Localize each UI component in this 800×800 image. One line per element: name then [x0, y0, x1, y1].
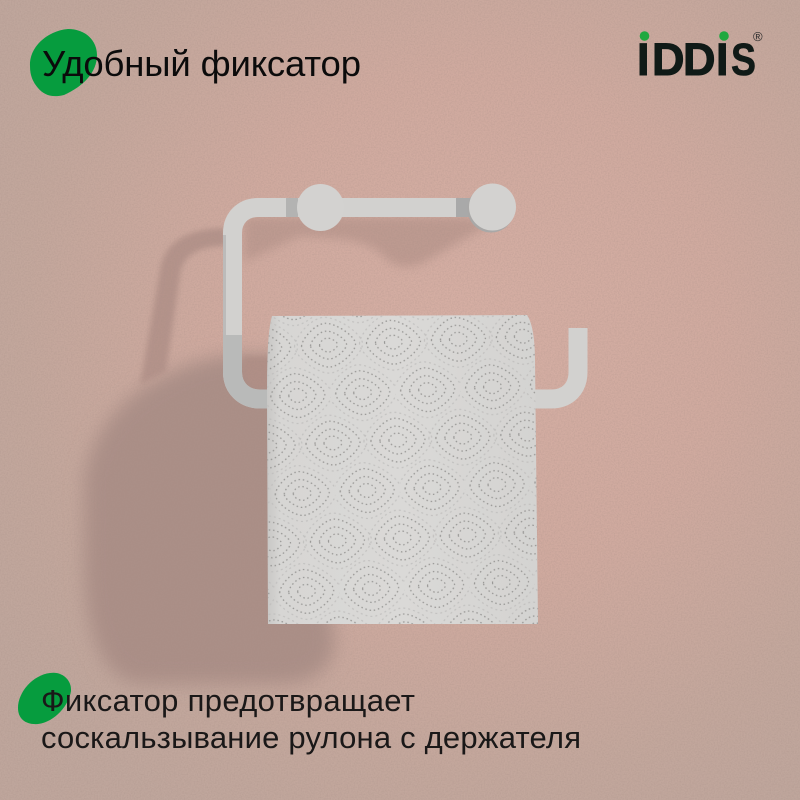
shadow: top bar: [244, 217, 490, 267]
post: right: [469, 184, 516, 230]
caption group: [18, 673, 581, 755]
wall shadows: [84, 217, 490, 684]
logo dot: second i: [719, 31, 729, 41]
roll body: [267, 315, 538, 624]
shadow: roll: [84, 354, 335, 684]
shadow: left arm: [140, 228, 226, 385]
caption line 2: соскальзывание рулона с держателя: [41, 720, 581, 755]
green blob: heading: [30, 29, 97, 96]
logo registered mark: ®: [753, 29, 763, 44]
paper roll: [267, 315, 538, 624]
holder rail: [232, 208, 578, 399]
toilet paper holder: [224, 184, 578, 399]
rail shadow at second post: [456, 198, 470, 217]
post: right edge: [468, 186, 514, 232]
logo letters: IDDI: [637, 34, 729, 85]
rail shadow at first post: [286, 198, 298, 217]
shadow: lower inner arm: [243, 357, 272, 390]
logo: IDDIS: [637, 29, 763, 85]
heading: Удобный фиксатор: [42, 43, 361, 84]
caption line 1: Фиксатор предотвращает: [41, 683, 415, 718]
heading group: [30, 29, 361, 96]
roll embossed pattern: [267, 315, 538, 624]
green blob: caption: [18, 673, 71, 724]
post: left: [297, 184, 344, 231]
rail shaded lower part: [232, 335, 275, 399]
logo letter S: S: [731, 34, 756, 85]
rail shading edge: [223, 235, 226, 335]
logo dot: first i: [640, 31, 649, 41]
